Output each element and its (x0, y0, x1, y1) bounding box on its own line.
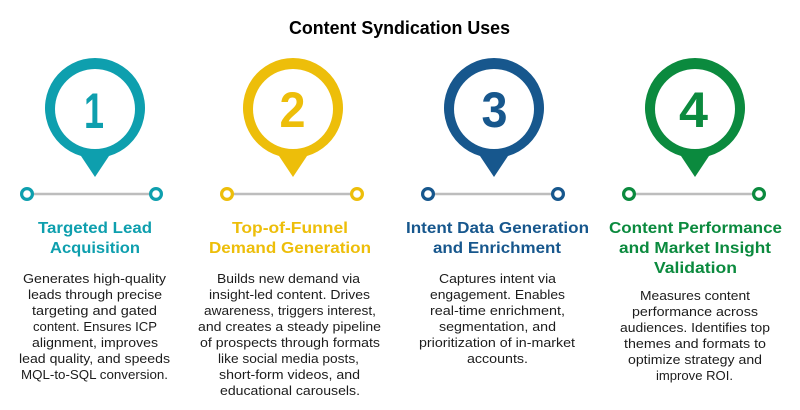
body text 4: themes and formats to (624, 337, 766, 351)
timeline connector 3 (423, 189, 563, 199)
panel: step 3 intent data generation and enrichment (406, 58, 589, 366)
body text 1: alignment, improves (32, 336, 158, 350)
icon: pin 4: 4 (679, 82, 708, 138)
heading 1: Targeted Lead (38, 220, 152, 237)
title: Content Syndication Uses (289, 18, 510, 38)
body text 2: short-form videos, and (219, 368, 360, 382)
body text 4: improve ROI. (656, 369, 733, 383)
heading 3 (406, 220, 589, 257)
body text 1: Generates high-quality (23, 272, 167, 286)
body text 4: optimize strategy and (628, 353, 762, 367)
icon: pin 3: 3 (482, 82, 508, 138)
icon: pin 2 (243, 58, 343, 177)
heading 2 (209, 220, 371, 257)
body text 2: and creates a steady pipeline (198, 320, 381, 334)
body text 2: like social media posts, (218, 352, 359, 366)
body text 1: leads through precise (28, 288, 162, 302)
body text 3: real-time enrichment, (430, 304, 565, 318)
body text 2: of prospects through formats (200, 336, 380, 350)
heading 2: Demand Generation (209, 240, 371, 257)
body text 4: performance across (632, 305, 758, 319)
heading 3: and Enrichment (433, 240, 562, 257)
heading 4: Validation (654, 260, 737, 277)
body text 3: engagement. Enables (430, 288, 565, 302)
body text 2: educational carousels. (220, 384, 360, 398)
body text 3: prioritization of in-market (419, 336, 576, 350)
icon: pin 1 (45, 58, 145, 177)
timeline connector 2 (222, 189, 362, 199)
body text 3: segmentation, and (439, 320, 556, 334)
panel: step 4 content performance and market insight validation (609, 58, 782, 383)
timeline connector 1 (22, 189, 161, 199)
body text 3: accounts. (467, 352, 528, 366)
icon: pin 3 (444, 58, 544, 177)
icon: pin 1: 1 (84, 83, 104, 139)
body text 2: awareness, triggers interest, (204, 304, 376, 318)
body text 4 (620, 289, 770, 383)
heading 3: Intent Data Generation (406, 220, 589, 237)
heading 4: and Market Insight (619, 240, 772, 257)
body text 2: insight-led content. Drives (209, 288, 370, 302)
body text 1: content. Ensures ICP (33, 320, 157, 334)
body text 1: MQL-to-SQL conversion. (21, 368, 168, 382)
icon: pin 2: 2 (280, 82, 306, 138)
heading 1 (38, 220, 152, 257)
heading 4 (609, 220, 782, 277)
body text 2: Builds new demand via (217, 272, 360, 286)
body text 1 (19, 272, 170, 382)
body text 4: audiences. Identifies top (620, 321, 770, 335)
body text 1: lead quality, and speeds (19, 352, 170, 366)
panel: step 1 targeted lead acquisition (19, 58, 170, 382)
panel: step 2 top-of-funnel demand generation (198, 58, 381, 398)
timeline connector 4 (624, 189, 764, 199)
body text 3 (419, 272, 576, 366)
heading 2: Top-of-Funnel (232, 220, 348, 237)
heading 1: Acquisition (50, 240, 140, 257)
body text 4: Measures content (640, 289, 751, 303)
body text 2 (198, 272, 381, 398)
body text 3: Captures intent via (439, 272, 556, 286)
icon: pin 4 (645, 58, 745, 177)
heading 4: Content Performance (609, 220, 782, 237)
body text 1: targeting and gated (32, 304, 157, 318)
